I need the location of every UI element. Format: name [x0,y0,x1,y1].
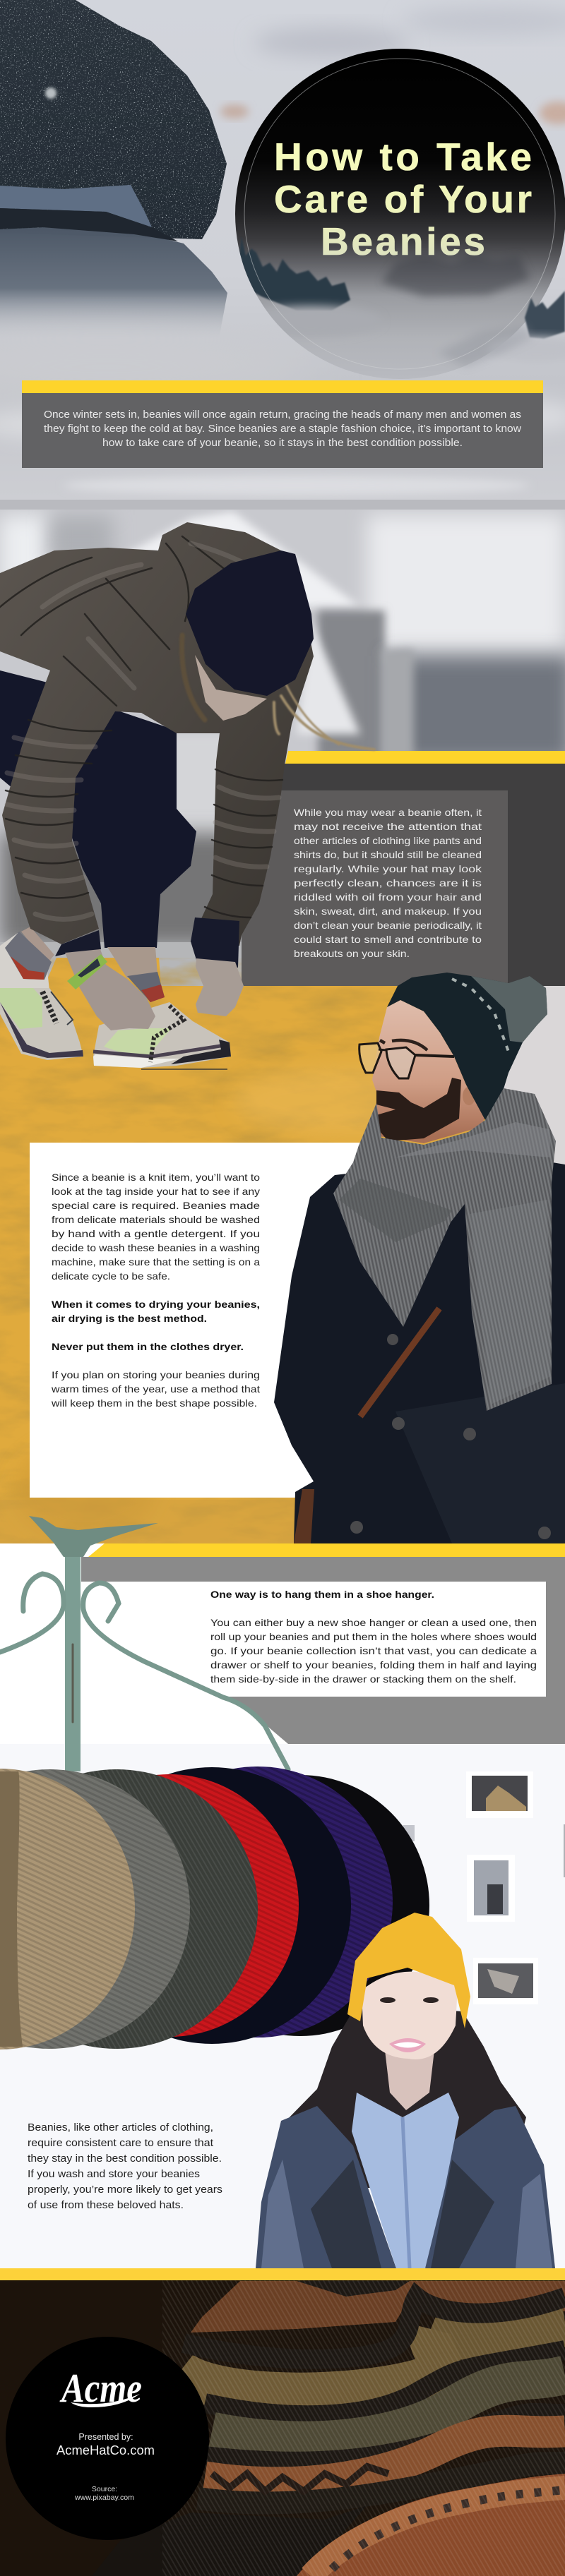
closing text [28,2121,222,2211]
pants [0,670,196,948]
hat body [191,2281,565,2333]
panel text: why clean: While you may wear a beanie often, it [294,807,482,818]
room wall backdrop with photos [0,1744,565,2268]
grey box [22,393,543,468]
closing text: require consistent care to ensure that [28,2137,214,2149]
purple beanie [123,1767,393,2038]
storage text: warm times of the year, use a method that [51,1383,260,1395]
white text panel: washing [30,1143,362,1498]
hero section background: misty winter scene [0,0,565,500]
hands [65,949,155,1030]
title text: Care of Your [274,177,532,221]
neck [385,2050,434,2110]
photo: woman tying shoes in black beanie [0,522,374,1069]
yellow bar [88,1543,565,1557]
bold drying text: When it comes to drying your beanies, [52,1299,260,1310]
hung beanies [0,1767,429,2050]
presenter text: Presented by: [78,2432,133,2442]
washing text [52,1172,260,1282]
grey beanie [0,1769,190,2049]
storage text: will keep them in the best shape possible. [51,1397,257,1409]
circle fill [235,49,565,379]
intro text: Once winter sets in, beanies will once again return, gracing the heads of many men and women as [44,409,521,421]
panel text: why clean: other articles of clothing like pants and [294,835,482,846]
closing text: If you wash and store your beanies [28,2168,200,2180]
grey panel [81,1557,565,1744]
photo: person in speckled knit beanie [0,0,233,346]
coat buttons [350,1334,551,1539]
yellow bar [22,380,543,393]
intro text [44,409,522,449]
closing text: they stay in the best condition possible. [28,2153,222,2165]
fog over the hero photo [0,335,318,399]
beard and moustache [376,1078,461,1141]
right arm [83,1583,288,1769]
tan beanie [0,1769,135,2050]
title text [274,135,532,263]
panel text: why clean: skin, sweat, dirt, and makeup. If you [294,905,482,917]
eyes and mouth [380,1997,439,2003]
black beanie [171,1775,429,2036]
washing text: look at the tag inside your hat to see if any [52,1186,260,1197]
ribbed lower hat [92,2505,367,2576]
yellow plaster wall [0,958,493,1543]
washing text: machine, make sure that the setting is on a [52,1256,260,1268]
photo: woman in yellow beanie [256,1913,555,2268]
Acme logo: Acme [59,2365,142,2411]
panel text: why clean: don’t clean your beanie periodically, it [294,920,482,931]
right shoe [93,1002,231,1068]
panel text: why clean: breakouts on your skin. [294,948,410,959]
footer black circle: AcmeHatCo.com [56,2443,155,2457]
storage text [51,1369,260,1409]
black beanie [186,550,314,696]
face [195,655,267,721]
dark backing panel [279,764,565,986]
panel text: why clean: shirts do, but it should still be cleaned [294,849,482,860]
photo: man in scarf and knit beanie [274,973,565,1543]
hanger with bird [0,1516,288,1771]
knit beanie [387,973,547,1120]
sleeve cuffs [191,917,239,968]
white text box [106,1582,546,1697]
navy beanie [73,1767,351,2044]
dark coat [274,1157,565,1543]
bag strap [360,1308,439,1416]
hanger tip text: You can either buy a new shoe hanger or clean a used one, then [210,1617,537,1628]
closing text: Beanies, like other articles of clothing, [28,2121,213,2133]
yellow bar [285,751,565,764]
fitness band [67,954,107,989]
panel: shoe hanger tip [81,1543,565,1744]
hanger tip text: roll up your beanies and put them in the holes where shoes would [210,1631,537,1642]
storage text: If you plan on storing your beanies during [52,1369,260,1380]
section 2 background: blurred houses [0,500,565,994]
bold drying text [52,1299,260,1352]
source text: Source: [92,2485,117,2493]
hair [182,635,374,750]
panel: why clean your beanie [242,751,565,986]
bag [294,1489,314,1543]
hanger tip text: them side-by-side in the drawer or stacking them on the shelf. [210,1673,516,1685]
orange patterned brim [297,2474,565,2576]
left arm [0,1574,64,1652]
white plaster wall behind man [494,986,565,1184]
closing text: of use from these beloved hats. [28,2199,184,2211]
intro text: they fight to keep the cold at bay. Since beanies are a staple fashion choice, it’s important to know [44,423,522,435]
bold drying text: Never put them in the clothes dryer. [52,1341,244,1352]
jacket quilting [0,536,282,919]
eyebrow [380,1040,427,1050]
ear [463,1087,475,1105]
bold drying text: air drying is the best method. [52,1313,207,1324]
coat shoulder [0,224,227,346]
closing text: properly, you’re more likely to get years [28,2184,222,2196]
hanger tip text: go. If your beanie collection isn’t that vast, you can dedicate a [210,1645,537,1656]
bird [29,1516,158,1557]
washing text: Since a beanie is a knit item, you’ll want to [52,1172,260,1183]
inner ring [244,59,555,369]
footer black circle: www.pixabay.com [74,2493,134,2502]
ankle and leg skin [107,947,157,978]
knit bands [180,2297,565,2503]
inner translucent panel [242,790,508,986]
panel text: why clean: could start to smell and contribute to [294,934,482,945]
panel text: why clean: riddled with oil from your hair and [294,891,482,903]
lower white background [0,1543,565,2270]
title text: How to Take [274,135,532,179]
left sock and heel [0,933,49,990]
hanger tip text: drawer or shelf to your beanies, folding them in half and laying [210,1659,537,1671]
washing text: special care is required. Beanies made [52,1200,260,1211]
red beanie [40,1774,299,2037]
washing text: delicate cycle to be safe. [52,1270,170,1282]
face [372,1000,485,1143]
panel text: why clean [294,807,482,959]
panel text: why clean: perfectly clean, chances are it is [294,877,482,889]
face [362,1972,458,2059]
yellow beanie [347,1913,470,2028]
left shoe [0,988,83,1060]
washing text: from delicate materials should be washed [52,1214,260,1225]
title circle [235,49,565,379]
panel text: why clean: may not receive the attention that [294,821,482,832]
beanie knit [0,0,227,239]
intro text: how to take care of your beanie, so it stays in the best condition possible. [102,438,463,449]
glasses [359,1043,454,1078]
hanger tip text [210,1589,537,1685]
footer black circle [6,2337,209,2540]
right sock [127,972,165,1002]
pole [65,1556,81,1771]
intro panel [22,380,543,468]
pine forest silhouette [236,236,565,367]
coat collar [0,185,152,227]
title text: Beanies [321,219,485,263]
grey scarf [333,1088,556,1411]
washing text: by hand with a gentle detergent. If you [52,1228,260,1239]
triangles in knit pattern [212,2467,388,2491]
hair [282,2004,526,2188]
denim shirt [352,2093,459,2268]
hanger tip text: One way is to hang them in a shoe hanger. [210,1589,434,1600]
dark grey beanie [0,1769,258,2049]
leather jacket [256,2106,555,2268]
washing text: decide to wash these beanies in a washing [52,1242,260,1253]
panel text: why clean: regularly. While your hat may look [294,863,482,874]
footer yellow bar [0,2268,565,2280]
jacket torso and hood [0,522,314,946]
footer: knit hat photo [0,2280,565,2576]
